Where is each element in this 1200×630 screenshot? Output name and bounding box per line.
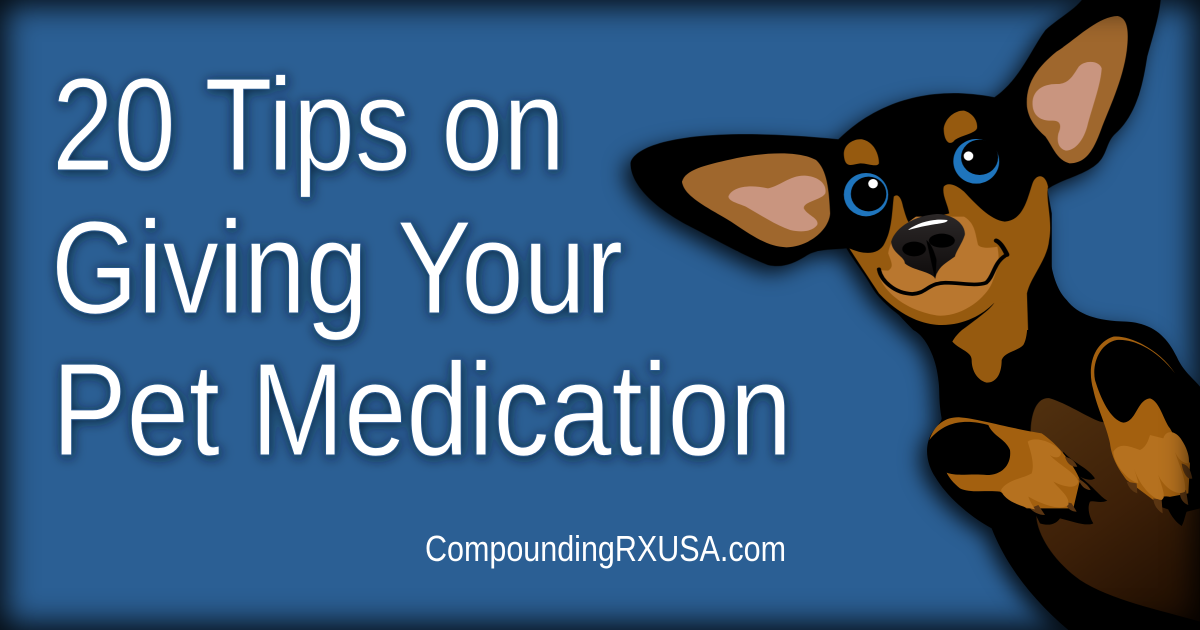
muzzle and neck bbox=[849, 176, 1050, 330]
title bbox=[51, 51, 792, 483]
eyebrows bbox=[844, 111, 977, 165]
chest patch bbox=[952, 300, 1027, 383]
title: Pet Medication bbox=[52, 336, 792, 483]
rear leg bbox=[1091, 337, 1192, 526]
left ear bbox=[682, 153, 830, 247]
face bbox=[682, 16, 1128, 330]
left eye bbox=[844, 173, 888, 216]
belly bbox=[1031, 398, 1200, 622]
muzzle highlight bbox=[878, 217, 999, 316]
title: Giving Your bbox=[51, 194, 623, 341]
website URL: CompoundingRXUSA.com bbox=[425, 528, 786, 569]
right eye bbox=[953, 139, 999, 184]
title: 20 Tips on bbox=[52, 51, 565, 198]
nose bbox=[891, 214, 965, 279]
chest and legs bbox=[929, 300, 1192, 526]
front leg bbox=[929, 417, 1107, 525]
mouth bbox=[879, 241, 1007, 294]
illustration: dachshund bbox=[630, 0, 1200, 630]
right ear bbox=[1027, 16, 1128, 163]
